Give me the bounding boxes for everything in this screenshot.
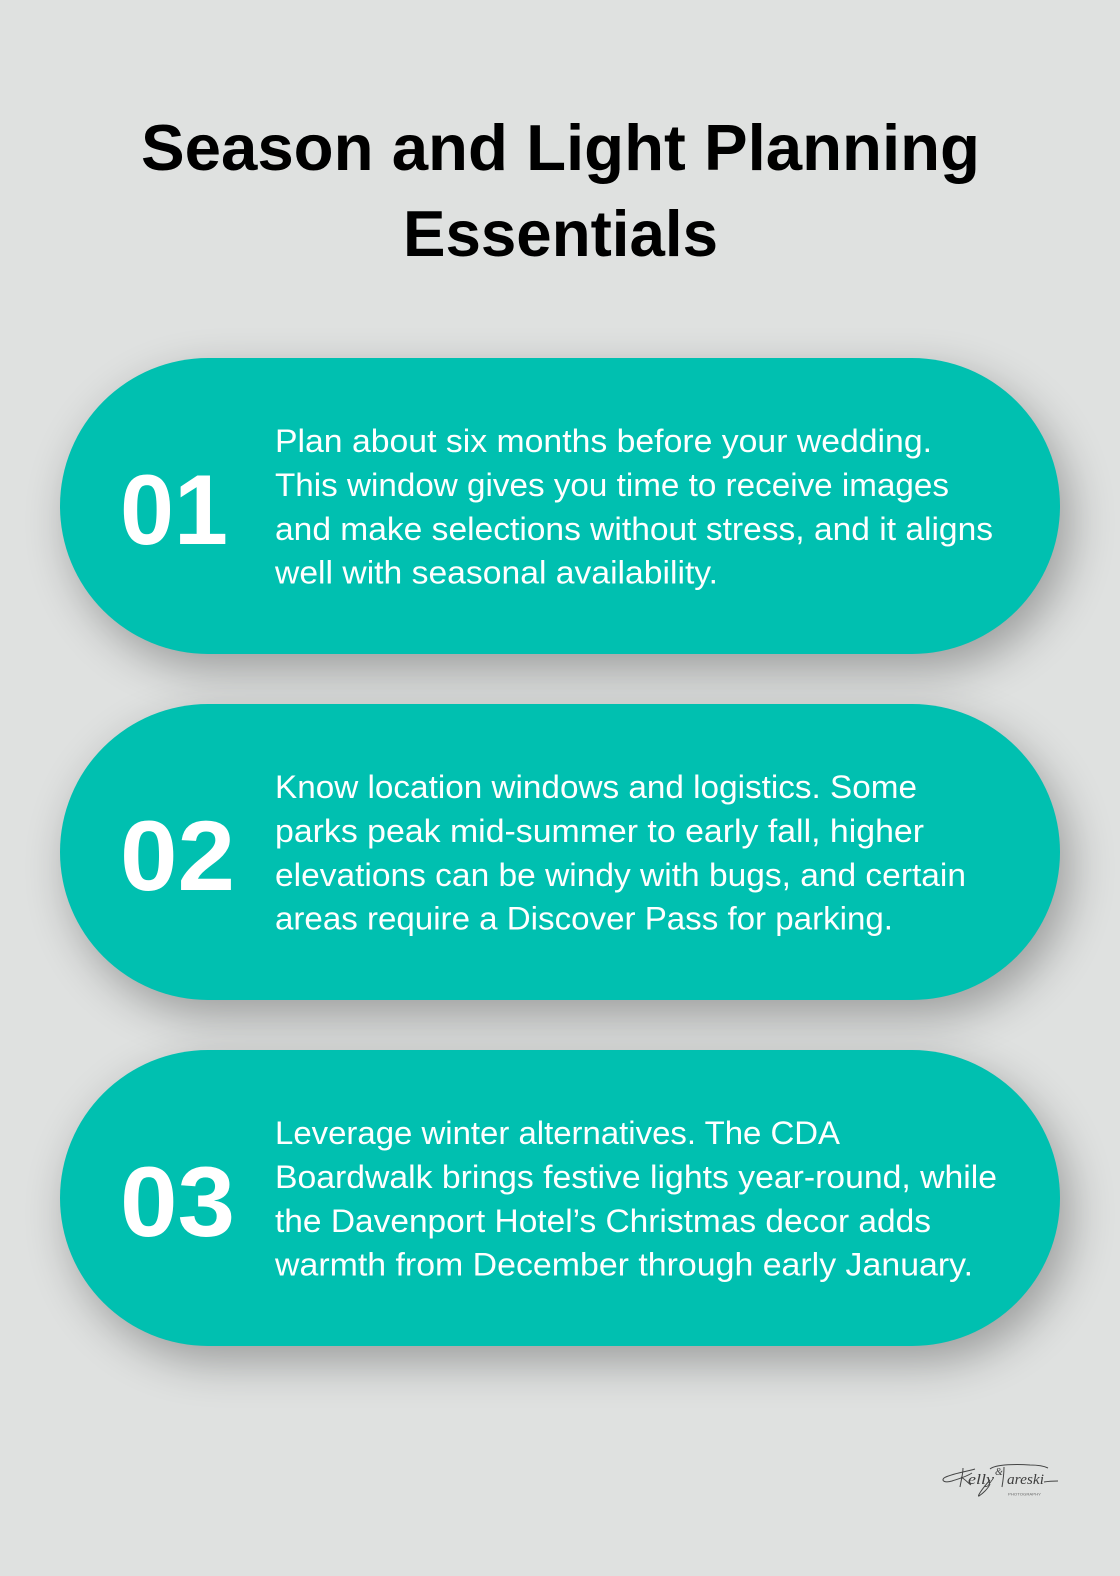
logo: signature: elly [968,1472,994,1488]
panel: step 01 background [60,358,1060,654]
step 01 text: Plan about six months before your wedding. [275,423,932,459]
step 02 text: Know location windows and logistics. Some [275,769,917,805]
step 02 text [275,769,966,936]
title [141,111,980,270]
logo: signature [943,1464,1058,1496]
step 03 text: Boardwalk brings festive lights year-round, while [275,1159,997,1195]
panel: step 03 background [60,1050,1060,1346]
step 02 number: 02 [120,800,235,911]
title: Essentials [403,197,718,270]
step 02 text: parks peak mid-summer to early fall, higher [275,813,924,849]
step 03 text: Leverage winter alternatives. The CDA [275,1115,841,1151]
logo: signature: areski [1007,1472,1044,1488]
logo: signature: PHOTOGRAPHY [1008,1492,1041,1496]
step 03 text: the Davenport Hotel’s Christmas decor adds [275,1203,931,1239]
step 02 text: areas require a Discover Pass for parking. [275,900,893,936]
step 01 text: This window gives you time to receive images [275,467,949,503]
step 01 number: 01 [120,454,228,565]
step 03 text: warmth from December through early January. [274,1246,973,1282]
step 03 text [274,1115,997,1282]
panel: step 02 background [60,704,1060,1000]
logo: signature: & [995,1467,1003,1478]
step 01 text [274,423,993,590]
step 01 text: and make selections without stress, and it aligns [275,511,993,547]
step 03 number: 03 [120,1146,235,1257]
title: Season and Light Planning [141,111,980,184]
step 01 text: well with seasonal availability. [274,554,718,590]
step 02 text: elevations can be windy with bugs, and certain [275,857,966,893]
